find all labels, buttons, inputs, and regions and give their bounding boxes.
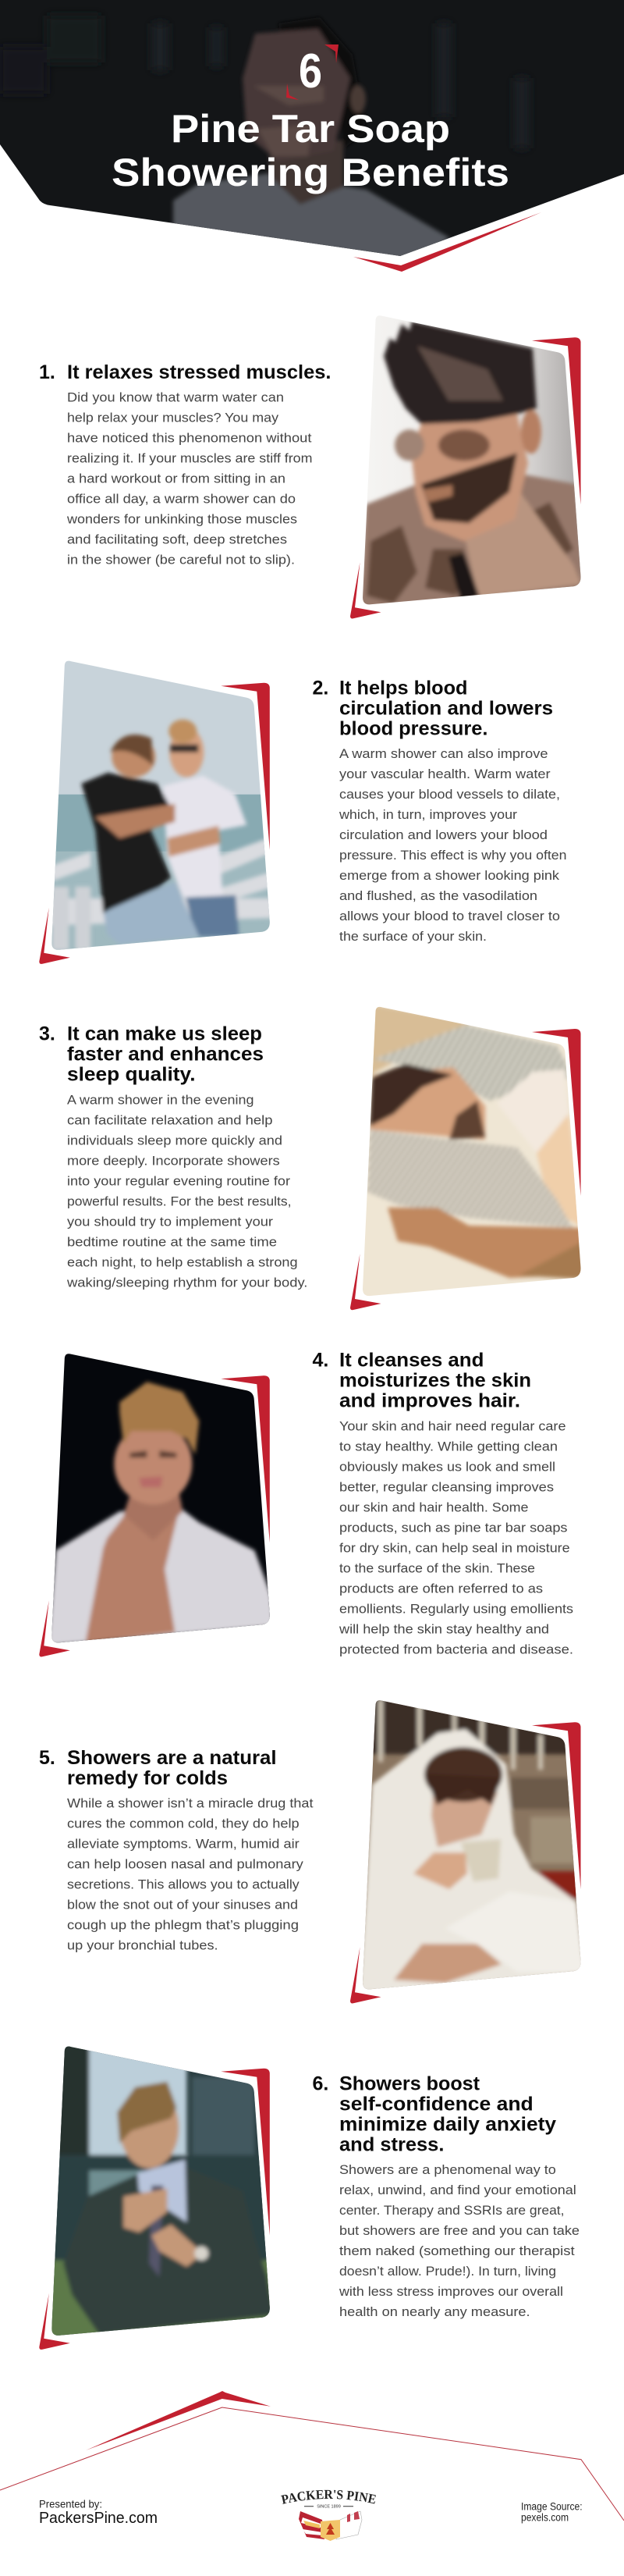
footer red chevron [86,2391,271,2450]
heading 2: circulation and lowers [339,697,553,719]
body text 1 [66,390,313,567]
body text 4: Your skin and hair need regular care [339,1419,566,1433]
body text 4: to stay healthy. While getting clean [339,1439,558,1453]
section 3: sleep [39,1002,589,1310]
footer [0,2391,624,2541]
body text 3: into your regular evening routine for [67,1174,291,1188]
logo: Packer's Pine: SINCE 1899 [317,2504,341,2509]
body text 6: center. Therapy and SSRIs are great, [339,2204,565,2218]
photo 5: man in blanket with mug [350,1695,589,2003]
body text 4: products, such as pine tar bar soaps [339,1521,568,1535]
photo 1: man with sunglasses and fur collar [350,311,589,618]
section 2: blood circulation [39,656,567,964]
photo 3: man sleeping on striped pillow [350,1002,589,1310]
body text 2: causes your blood vessels to dilate, [339,788,560,802]
heading 6: minimize daily anxiety [339,2113,556,2135]
body text 3: waking/sleeping rhythm for your body. [66,1276,307,1290]
logo: Packer's Pine [281,2490,376,2541]
body text 2: pressure. This effect is why you often [339,849,566,863]
body text 3: A warm shower in the evening [67,1093,254,1107]
body text 4 [339,1419,573,1656]
body text 6: health on nearly any measure. [339,2305,530,2319]
body text 6: them naked (something our therapist [339,2244,575,2258]
heading 5 [39,1747,277,1789]
body text 6: with less stress improves our overall [339,2285,563,2299]
body text 1: help relax your muscles? You may [67,411,279,425]
body text 5: cough up the phlegm that’s plugging [67,1919,299,1933]
heading 6: self-confidence and [339,2093,534,2115]
heading 5: 5. [39,1747,55,1769]
heading 2: 2. [312,677,328,699]
photo 4: shirtless man with blond hair [39,1349,278,1656]
presented by: Presented by: [39,2498,102,2510]
body text 1: in the shower (be careful not to slip). [67,553,295,567]
photo 2: two men on pier [39,656,278,964]
body text 6: but showers are free and you can take [339,2224,580,2238]
body text 1: realizing it. If your muscles are stiff from [67,451,312,465]
body text 2: which, in turn, improves your [339,808,518,822]
body text 3: powerful results. For the best results, [67,1194,292,1208]
body text 5: blow the snot out of your sinuses and [67,1898,298,1912]
body text 5: While a shower isn’t a miracle drug that [67,1797,314,1811]
heading 5: remedy for colds [67,1767,228,1789]
body text 5: alleviate symptoms. Warm, humid air [67,1838,300,1852]
heading 1: It relaxes stressed muscles. [67,361,331,383]
body text 3: you should try to implement your [67,1215,274,1229]
image source: Image Source: [521,2501,583,2513]
body text 6: Showers are a phenomenal way to [339,2163,556,2177]
heading 2: It helps blood [339,677,468,699]
header red accents [286,44,339,100]
heading 6: 6. [312,2073,328,2094]
section 6: self-confidence [39,2042,580,2350]
logo: Packer's Pine: PACKER'S PINE [281,2490,376,2504]
body text 4: better, regular cleansing improves [339,1480,554,1494]
body text 1: and facilitating soft, deep stretches [67,532,287,546]
heading 6 [312,2073,556,2155]
body text 1: Did you know that warm water can [67,390,284,404]
photo 6: man in suit adjusting tie [39,2042,278,2350]
section 5: colds [39,1695,589,2003]
heading 4: and improves hair. [339,1390,520,1412]
heading 1: 1. [39,361,55,383]
heading 6: Showers boost [339,2073,480,2094]
body text 5: cures the common cold, they do help [67,1817,300,1831]
body text 3 [66,1093,307,1290]
body text 6: relax, unwind, and find your emotional [339,2183,576,2197]
body text 3: more deeply. Incorporate showers [67,1154,280,1168]
heading 3: sleep quality. [67,1064,195,1086]
body text 4: for dry skin, can help seal in moisture [339,1541,570,1555]
header red chevron [353,212,541,272]
heading 4: It cleanses and [339,1350,484,1372]
body text 1: wonders for unkinking those muscles [66,512,297,526]
body text 1: a hard workout or from sitting in an [67,471,285,486]
body text 5 [67,1797,314,1953]
body text 3: each night, to help establish a strong [67,1255,298,1269]
heading 4: 4. [312,1350,328,1372]
body text 3: individuals sleep more quickly and [67,1133,282,1147]
body text 2: circulation and lowers your blood [339,828,548,842]
heading 6: and stress. [339,2133,444,2155]
heading 3: 3. [39,1023,55,1045]
image source: pexels.com [521,2512,569,2523]
body text 5: up your bronchial tubes. [67,1939,218,1953]
body text 4: emollients. Regularly using emollients [339,1602,573,1616]
body text 4: our skin and hair health. Some [339,1500,529,1514]
section 4: skin and hair [39,1349,573,1656]
heading 5: Showers are a natural [67,1747,277,1769]
body text 3: bedtime routine at the same time [67,1235,277,1249]
body text 2: emerge from a shower looking pink [339,869,560,883]
title: Showering Benefits [112,151,509,194]
presented by [39,2498,158,2527]
title [112,44,509,194]
heading 4 [312,1350,531,1412]
image source [521,2501,583,2523]
body text 2: A warm shower can also improve [339,747,548,761]
body text 2: the surface of your skin. [339,930,487,944]
body text 2: and flushed, as the vasodilation [339,889,537,903]
title: 6 [299,44,322,98]
heading 2: blood pressure. [339,717,488,739]
heading 3: It can make us sleep [67,1023,262,1045]
heading 3 [39,1023,264,1086]
body text 4: will help the skin stay healthy and [339,1622,549,1636]
body text 6 [339,2163,580,2319]
body text 6: doesn’t allow. Prude!). In turn, living [339,2265,556,2279]
body text 2: your vascular health. Warm water [339,767,551,781]
heading 3: faster and enhances [67,1044,264,1066]
section 1: relaxes stressed muscles [39,311,589,618]
header photo: man in shower [0,0,624,269]
body text 5: secretions. This allows you to actually [67,1878,300,1892]
presented by: PackersPine.com [39,2510,158,2527]
body text 1: office all day, a warm shower can do [67,492,296,506]
body text 2 [339,747,566,944]
body text 5: can help loosen nasal and pulmonary [67,1858,304,1872]
body text 3: can facilitate relaxation and help [67,1113,273,1127]
body text 4: obviously makes us look and smell [339,1460,555,1474]
heading 2 [312,677,553,739]
header banner [0,0,624,272]
heading 4: moisturizes the skin [339,1370,531,1392]
body text 4: to the surface of the skin. These [339,1561,535,1575]
body text 4: protected from bacteria and disease. [339,1642,573,1656]
body text 1: have noticed this phenomenon without [67,431,312,445]
body text 2: allows your blood to travel closer to [339,909,560,923]
title: Pine Tar Soap [171,107,450,151]
body text 4: products are often referred to as [339,1582,543,1596]
